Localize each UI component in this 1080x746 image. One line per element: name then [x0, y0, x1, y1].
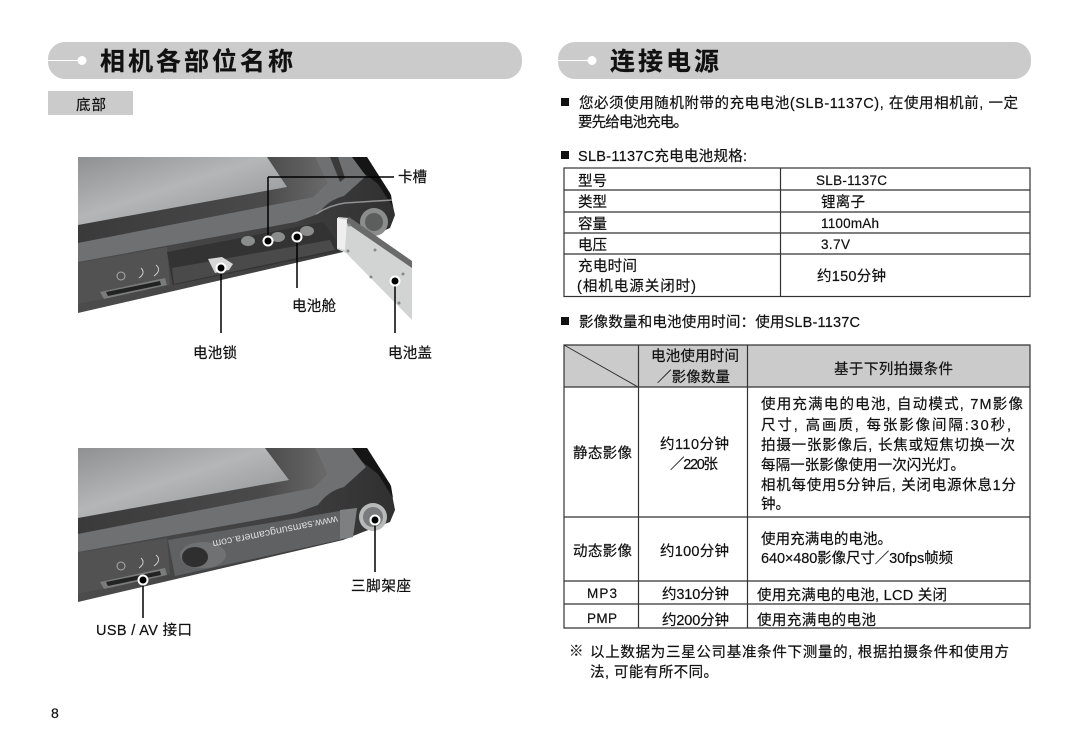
row: 动态影像: 640×480影像尺寸／30fps帧频 — [761, 550, 954, 567]
sub-heading: 底部: 底部 — [76, 97, 106, 114]
callout: 电池盖: 电池盖 — [388, 345, 432, 362]
row: PMP: 约200分钟 — [662, 612, 729, 629]
battery spec heading: SLB-1137C充电电池规格: — [578, 148, 747, 165]
heading: 相机各部位名称 — [48, 42, 522, 79]
callout: 电池锁 — [193, 264, 237, 362]
footnote: 法, 可能有所不同。 — [590, 664, 718, 681]
image count heading: 影像数量和电池使用时间：使用SLB-1137C — [579, 314, 860, 331]
callout: 电池舱: 电池舱 — [292, 298, 336, 315]
table header row: 电池使用时间 — [651, 348, 739, 365]
table: battery specifications: 容量 — [578, 216, 607, 233]
row: 动态影像 — [573, 531, 954, 567]
footnote: 以上数据为三星公司基准条件下测量的, 根据拍摄条件和使用方 — [590, 644, 1009, 661]
footnote: ※ — [569, 644, 584, 660]
callout: 三脚架座: 三脚架座 — [351, 578, 411, 595]
callout: 电池锁: 电池锁 — [193, 345, 237, 362]
table: battery specifications: 电压 — [578, 237, 607, 254]
page number: 8 — [51, 705, 59, 721]
intro text: charging notice: 您必须使用随机附带的充电电池(SLB-1137C), 在使用相机前, 一定 — [579, 95, 1018, 112]
table: battery specifications: 充电时间 — [578, 258, 637, 275]
table: battery specifications: 类型 — [578, 194, 607, 211]
row: 静态影像: 每隔一张影像使用一次闪光灯。 — [761, 457, 965, 474]
photo: camera bottom with battery cover closed: www.samsungcamera.com — [211, 513, 340, 550]
row: MP3: 使用充满电的电池, LCD 关闭 — [757, 587, 947, 604]
table: battery specifications: 约150分钟 — [817, 268, 886, 285]
table: battery life and shooting conditions — [564, 345, 1030, 629]
callout: USB / AV 接口: USB / AV 接口 — [96, 622, 192, 639]
row: 动态影像: 使用充满电的电池。 — [761, 531, 892, 548]
row: 静态影像: 拍摄一张影像后, 长焦或短焦切换一次 — [761, 437, 1015, 454]
table: battery specifications: 型号 — [578, 173, 607, 190]
intro text: charging notice: 要先给电池充电。 — [578, 114, 688, 131]
row: PMP: 使用充满电的电池 — [757, 612, 876, 629]
row: 动态影像: 约100分钟 — [660, 543, 729, 560]
row: 静态影像: 约110分钟 — [660, 436, 729, 453]
callout: 电池盖 — [388, 276, 432, 362]
row: 静态影像: 尺寸, 高画质, 每张影像间隔:30秒, — [761, 417, 1011, 434]
footnote — [569, 644, 1009, 681]
row: MP3: 约310分钟 — [662, 586, 729, 603]
table: battery specifications: SLB-1137C — [816, 173, 887, 188]
callout: 三脚架座 — [351, 516, 411, 595]
row: 静态影像: 相机每使用5分钟后, 关闭电源休息1分 — [761, 477, 1016, 494]
row: PMP — [587, 611, 876, 629]
row: 静态影像: 钟。 — [761, 496, 790, 513]
callout: USB / AV 接口 — [96, 576, 192, 639]
row: PMP: PMP — [587, 611, 617, 626]
callout: 卡槽: 卡槽 — [398, 169, 427, 186]
table header row — [564, 345, 1030, 387]
heading: 相机各部位名称: 相机各部位名称 — [100, 47, 293, 76]
table header row: 基于下列拍摄条件 — [834, 361, 953, 378]
row: 静态影像: ／220张 — [670, 456, 718, 473]
photo: camera bottom with battery cover closed — [78, 448, 395, 602]
table: battery specifications: 3.7V — [821, 237, 850, 252]
row: 静态影像: 使用充满电的电池, 自动模式, 7M影像 — [761, 396, 1024, 413]
row: MP3: MP3 — [587, 586, 617, 601]
photo: camera bottom with battery cover open — [78, 157, 412, 320]
table: battery specifications: 锂离子 — [821, 194, 865, 211]
table header row: ／影像数量 — [657, 369, 730, 386]
row: MP3 — [587, 586, 947, 604]
row: 静态影像 — [573, 396, 1024, 513]
sub-heading: 底部 — [48, 91, 133, 115]
row: 动态影像: 动态影像 — [573, 543, 632, 560]
heading: 连接电源: 连接电源 — [610, 48, 719, 76]
heading: 连接电源 — [558, 42, 1031, 79]
intro text: charging notice — [561, 95, 1018, 131]
callout: 电池舱 — [292, 232, 336, 315]
callout: 卡槽 — [264, 169, 427, 246]
table: battery specifications: (相机电源关闭时) — [577, 278, 696, 295]
table: battery specifications: 1100mAh — [821, 216, 879, 231]
table: battery specifications — [564, 168, 1030, 296]
row: 静态影像: 静态影像 — [573, 445, 632, 462]
